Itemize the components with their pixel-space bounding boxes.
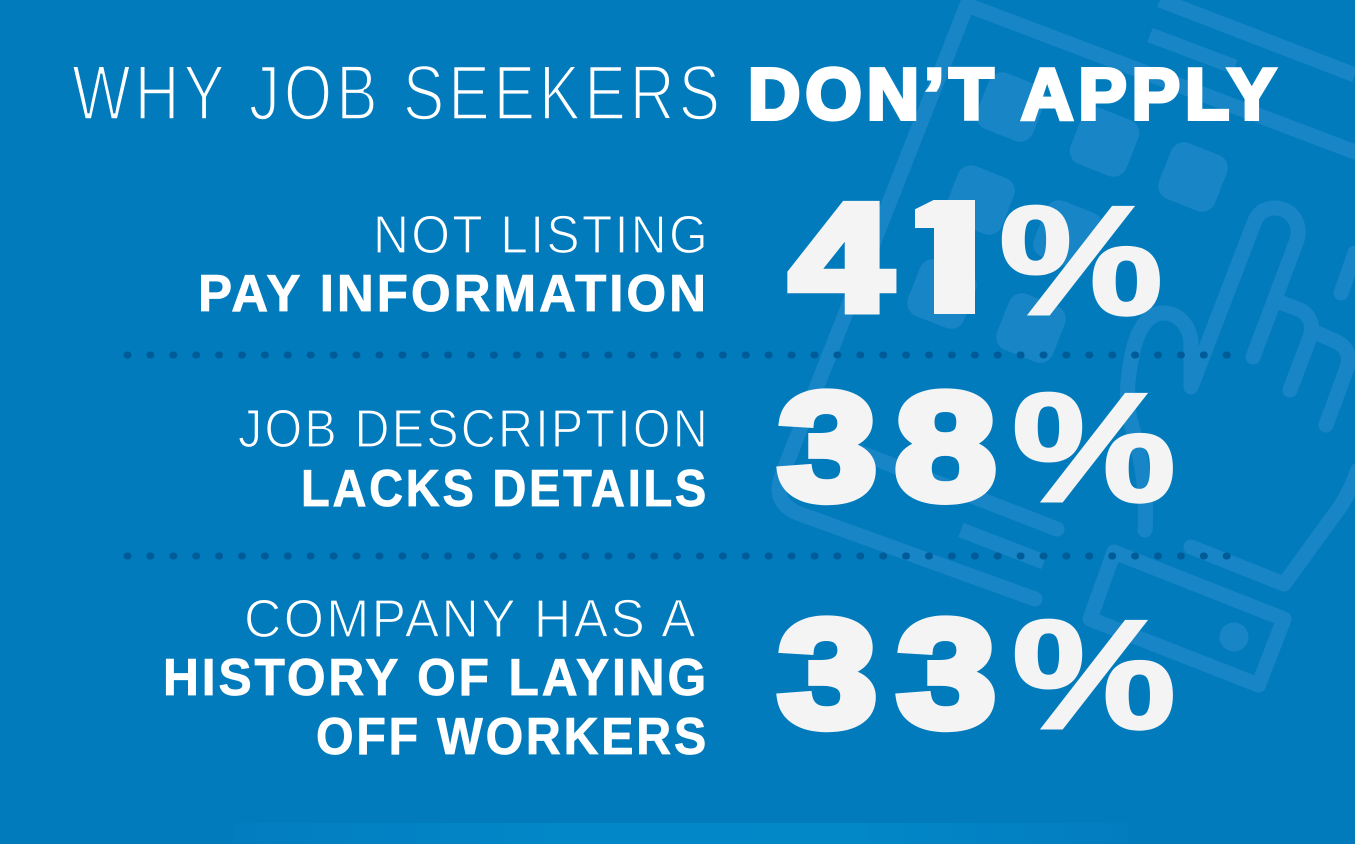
hand outline — [1128, 208, 1298, 530]
percent sign: % — [999, 174, 1163, 347]
digit 3: 3 — [778, 362, 877, 532]
second digit 3: 3 — [897, 589, 996, 759]
label line 2: HISTORY OF LAYING — [163, 649, 709, 707]
label line 1: NOT LISTING — [373, 205, 710, 265]
hand lower edge — [1191, 470, 1355, 584]
label line 1: JOB DESCRIPTION — [238, 399, 710, 459]
row: job description lacks details — [238, 361, 1176, 534]
label line 2: LACKS DETAILS — [301, 460, 709, 518]
label line 3: OFF WORKERS — [316, 708, 709, 766]
stat 41% — [787, 200, 1160, 317]
percent sign: % — [1012, 361, 1176, 534]
title — [72, 48, 1281, 136]
digit 4: 4 — [790, 173, 892, 343]
phone app tiles — [903, 68, 1232, 367]
first digit 3: 3 — [778, 589, 877, 759]
icon: phone and tapping hand watermark — [779, 0, 1355, 685]
card dot — [1220, 622, 1248, 652]
stat 33% — [778, 588, 1176, 761]
phone bottom lines — [853, 450, 1057, 529]
digit 8: 8 — [895, 362, 996, 532]
row: company history of laying off workers — [163, 588, 1176, 766]
row: not listing pay information — [201, 200, 1160, 317]
phone top line — [1160, 0, 1355, 75]
card outline — [1090, 552, 1284, 685]
divider dots 2 — [127, 552, 1228, 560]
phone outline — [779, 5, 1355, 599]
stat 38% — [778, 361, 1176, 534]
bottom strip — [233, 823, 1128, 844]
phone speaker line — [1150, 35, 1235, 67]
divider dots 1 — [127, 352, 1228, 358]
title bold part: DON’T APPLY — [748, 55, 1281, 135]
label line 1: COMPANY HAS A — [244, 589, 698, 649]
digit 1: 1 — [893, 173, 1003, 343]
percent sign: % — [1012, 588, 1176, 761]
label line 2: PAY INFORMATION — [198, 265, 709, 323]
title light part: WHY JOB SEEKERS — [72, 48, 724, 136]
hand fingers — [1279, 302, 1312, 390]
